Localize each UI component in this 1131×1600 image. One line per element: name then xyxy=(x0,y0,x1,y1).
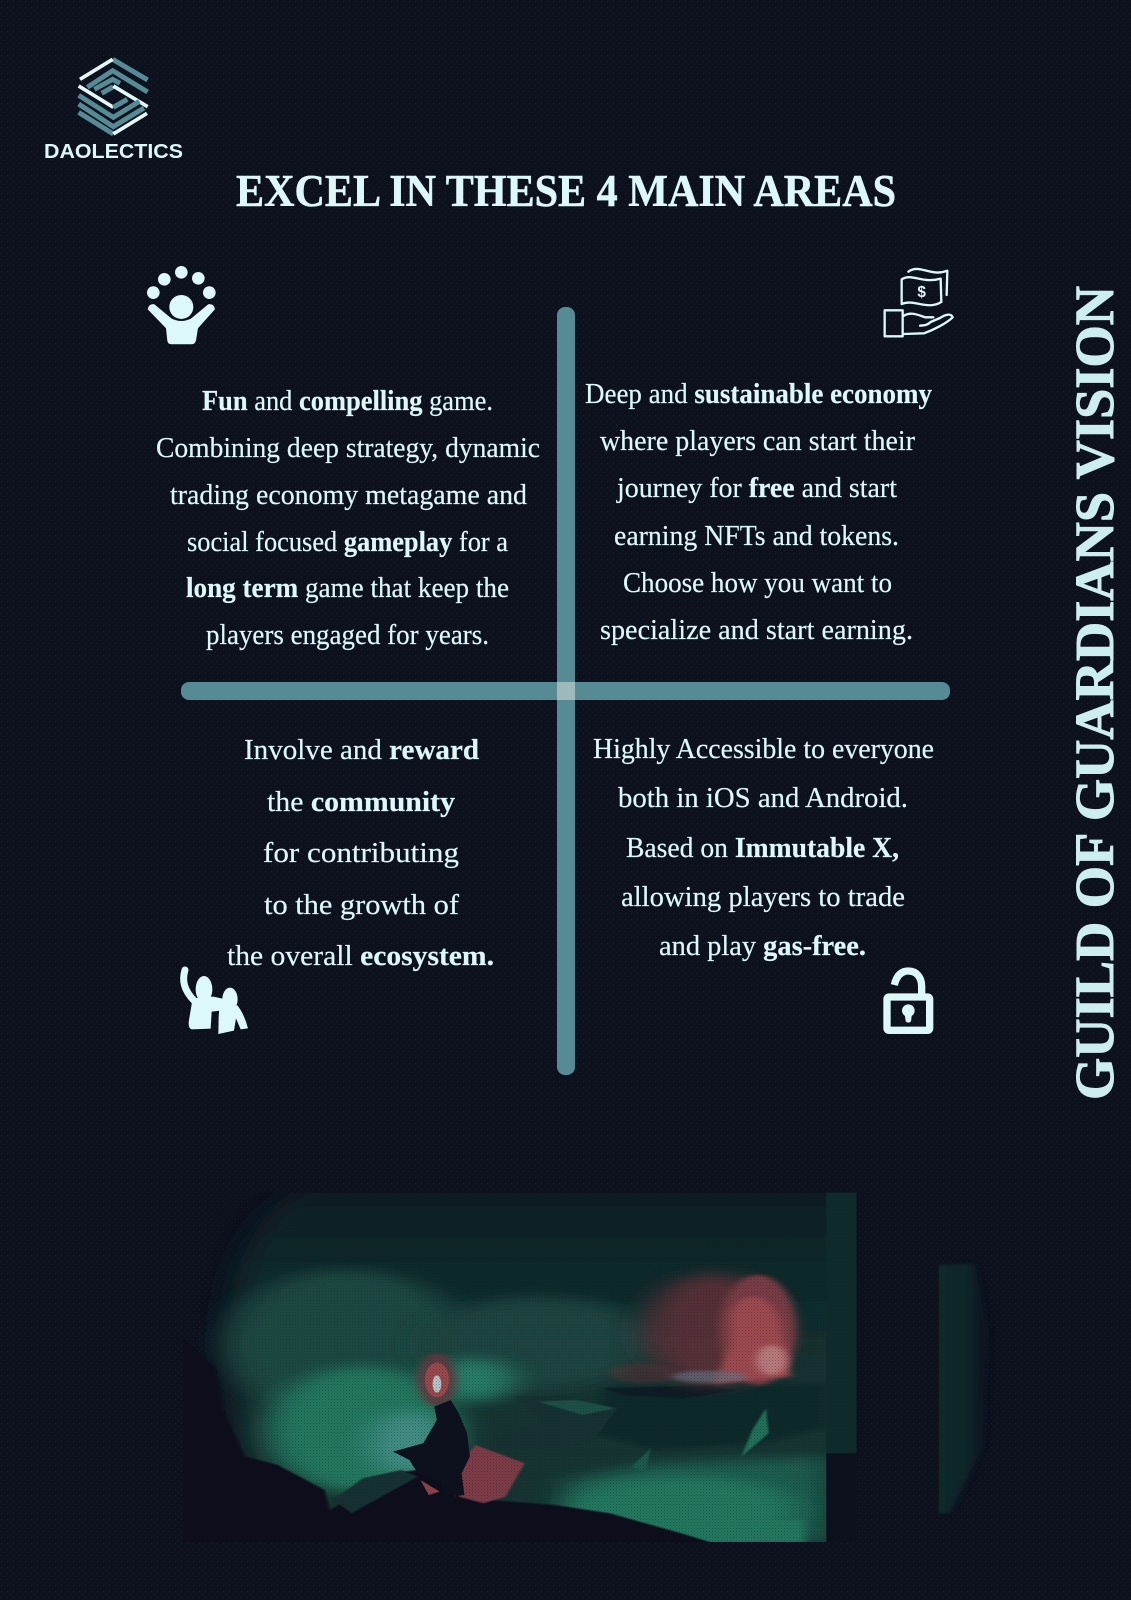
icon: hand holding money: $ xyxy=(917,284,926,301)
panel: reward the community xyxy=(227,734,494,972)
logo wordmark: DAOLECTICS xyxy=(44,141,183,163)
foreground rock xyxy=(182,1340,714,1543)
panel: highly accessible: Based on Immutable X, xyxy=(626,832,899,864)
mid green haze xyxy=(226,1270,467,1417)
red floor glow xyxy=(459,1445,525,1503)
panel: fun and compelling game: players engaged for years. xyxy=(206,619,489,651)
panel: reward the community: the overall ecosystem. xyxy=(227,940,494,972)
panel: fun and compelling game: social focused gameplay for a xyxy=(187,526,508,558)
panel: reward the community: for contributing xyxy=(263,837,459,869)
cave dark green base xyxy=(222,1192,826,1542)
illustration: cavern scene with hooded figure xyxy=(184,1192,986,1542)
logo: Daolectics xyxy=(44,59,183,163)
lit green left xyxy=(267,1367,459,1493)
panel: fun and compelling game: Combining deep strategy, dynamic xyxy=(156,432,540,464)
lit green lower right xyxy=(566,1457,826,1542)
panel: reward the community: to the growth of xyxy=(264,889,459,921)
panel: sustainable economy: specialize and start earning. xyxy=(600,614,913,646)
panel: fun and compelling game: long term game that keep the xyxy=(186,572,509,604)
title: EXCEL IN THESE 4 MAIN AREAS xyxy=(236,166,896,216)
side strip of cavern xyxy=(938,1263,986,1514)
red portal glow xyxy=(645,1273,782,1387)
panel: reward the community: the community xyxy=(267,786,455,818)
panel: fun and compelling game: Fun and compelling game. xyxy=(202,385,493,417)
icon: community people xyxy=(184,970,248,1034)
rock bridge xyxy=(518,1397,616,1446)
panel: sustainable economy: earning NFTs and tokens. xyxy=(614,520,899,552)
panel: highly accessible: and play gas-free. xyxy=(659,930,866,962)
panel: sustainable economy: where players can start their xyxy=(600,425,915,457)
panel: highly accessible xyxy=(593,733,934,962)
panel: sustainable economy: Deep and sustainable economy xyxy=(585,378,932,410)
panel: highly accessible: both in iOS and Android. xyxy=(618,782,908,814)
icon: person juggling xyxy=(147,266,216,344)
dither texture xyxy=(215,1193,856,1542)
panel: fun and compelling game: trading economy metagame and xyxy=(170,479,527,511)
hooded figure xyxy=(393,1400,470,1497)
ledge shadow xyxy=(593,1384,828,1450)
icon: hand holding money xyxy=(885,269,953,336)
torch xyxy=(417,1353,457,1407)
quadrant cross divider xyxy=(181,307,950,1075)
panel: highly accessible: allowing players to trade xyxy=(621,881,905,913)
panel: sustainable economy: Choose how you want to xyxy=(623,567,892,599)
icon: open padlock xyxy=(887,971,930,1030)
panel: sustainable economy xyxy=(585,378,932,646)
icon: hexagon chevron mark xyxy=(79,59,148,134)
panel: highly accessible: Highly Accessible to everyone xyxy=(593,733,934,765)
vertical side heading: GUILD OF GUARDIANS VISION xyxy=(1064,286,1125,1100)
panel: sustainable economy: journey for free and start xyxy=(616,472,897,504)
right pillar xyxy=(826,1193,856,1456)
panel: fun and compelling game xyxy=(156,385,540,651)
panel: reward the community: Involve and reward xyxy=(244,734,479,766)
stalagmites xyxy=(741,1408,769,1457)
